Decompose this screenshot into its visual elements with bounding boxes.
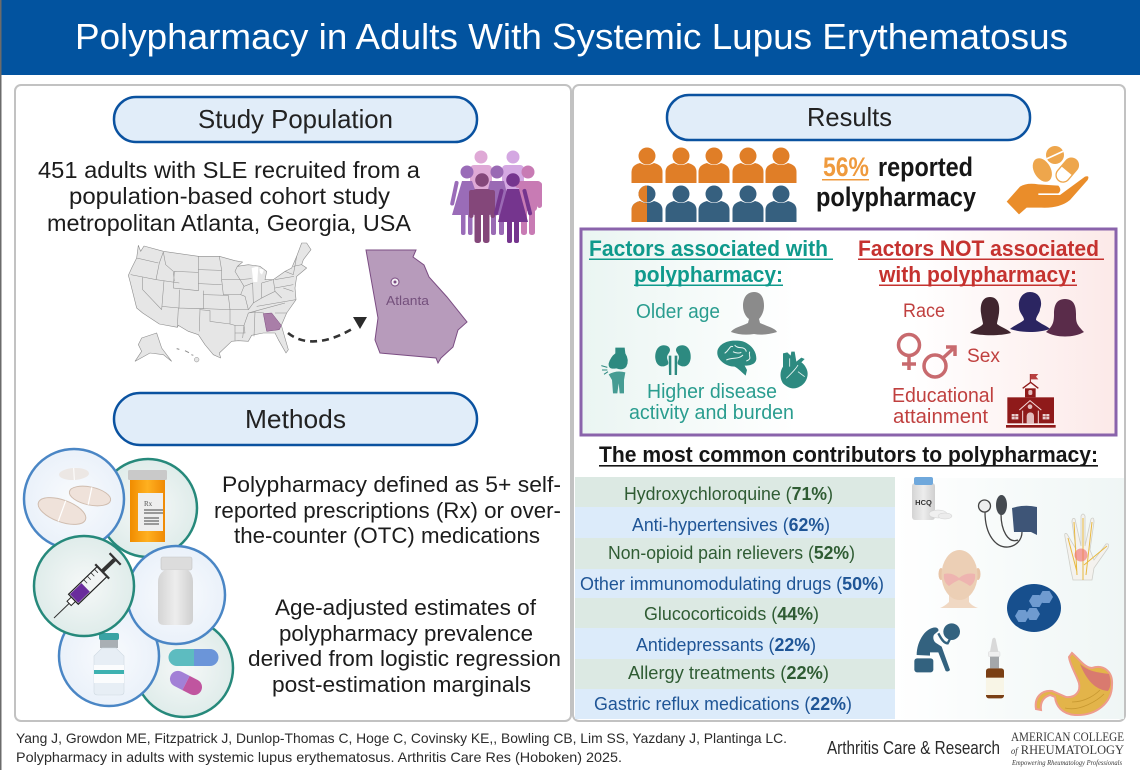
row: glucocorticoids <box>575 598 895 628</box>
row: non-opioid pain relievers: Non-opioid pain relievers (52%) <box>608 543 855 563</box>
heading: study population <box>114 97 477 142</box>
row: allergy treatments <box>575 659 895 689</box>
icon: molecule <box>1007 584 1061 632</box>
stat: 56 percent reported polypharmacy <box>816 152 976 212</box>
map: United States <box>128 243 311 362</box>
icon: grey head <box>731 292 777 335</box>
table: contributors with percentages <box>575 477 895 719</box>
column: associated factors <box>589 236 833 424</box>
icon: blood pressure cuff <box>978 495 1037 547</box>
row: anti-hypertensives: Anti-hypertensives (62%) <box>632 515 830 535</box>
row: gastric reflux medications <box>575 689 895 719</box>
stat: 56 percent reported polypharmacy: 56% <box>823 152 869 182</box>
icon: heart <box>780 352 808 388</box>
heading: associated factors <box>589 236 833 287</box>
citation: Polypharmacy in adults with systemic lupus erythematosus. Arthritis Care Res (Hoboken) 2025. <box>16 749 622 765</box>
logo: American College of Rheumatology: of RHEUMATOLOGY <box>1011 742 1125 757</box>
icon: syringe <box>34 536 134 636</box>
text: estimation method: derived from logistic regression <box>248 646 561 671</box>
icon: knee joint <box>601 348 628 393</box>
row: other immunomodulating drugs <box>575 569 895 598</box>
heading: most common contributors: The most common contributors to polypharmacy: <box>599 442 1098 467</box>
icon: capsules <box>135 619 233 717</box>
heading: associated factors: polypharmacy: <box>634 262 783 287</box>
row: other immunomodulating drugs: Other immunomodulating drugs (50%) <box>580 574 884 594</box>
icon: brain <box>717 341 756 376</box>
text: cohort description: 451 adults with SLE recruited from a <box>38 157 421 183</box>
row: gastric reflux medications: Gastric reflux medications (22%) <box>594 694 852 714</box>
heading: non-associated factors: Factors NOT associated <box>858 236 1099 261</box>
panel: results <box>573 85 1125 721</box>
stat: 56 percent reported polypharmacy: polypharmacy <box>816 182 976 212</box>
text: estimation method <box>248 595 561 697</box>
heading: associated factors: Factors associated with <box>589 236 828 261</box>
text: polypharmacy definition: the-counter (OTC) medications <box>234 523 540 548</box>
row: hydroxychloroquine <box>575 477 895 507</box>
logo: American College of Rheumatology: AMERICAN COLLEGE <box>1011 729 1124 744</box>
icon: prescription bottle: Rx <box>144 500 153 508</box>
icon: HCQ bottle <box>912 477 952 520</box>
icon: vial <box>59 606 159 706</box>
row: glucocorticoids: Glucocorticoids (44%) <box>644 604 819 624</box>
label: educational attainment: Educational <box>892 385 994 407</box>
icon: hand with nerve pain <box>1065 514 1109 580</box>
arrow: map to Georgia <box>288 317 367 341</box>
icon: hand holding pills <box>1007 143 1088 214</box>
citation: Yang J, Growdon ME, Fitzpatrick J, Dunlop-Thomas C, Hoge C, Covinsky KE,, Bowling CB, Lim SS, Yazdany J, Plantinga LC. <box>16 730 787 746</box>
icon: sex symbols <box>898 334 955 377</box>
row: anti-hypertensives <box>575 507 895 538</box>
text: cohort description <box>38 157 421 236</box>
text: estimation method: Age-adjusted estimates of <box>275 595 537 620</box>
label: sex: Sex <box>967 346 1000 367</box>
label: educational attainment: attainment <box>893 406 988 428</box>
label: disease activity: activity and burden <box>629 402 794 424</box>
icon: tablets <box>24 449 124 549</box>
highlighted state: Georgia <box>263 313 281 331</box>
row: allergy treatments: Allergy treatments (22%) <box>628 663 829 683</box>
map: Georgia with Atlanta: Atlanta <box>386 293 430 308</box>
logo: American College of Rheumatology: Empowering Rheumatology Professionals <box>1011 758 1122 767</box>
header banner <box>0 0 1140 75</box>
label: disease activity <box>629 381 794 424</box>
row: antidepressants: Antidepressants (22%) <box>636 635 816 655</box>
text: estimation method: post-estimation marginals <box>272 672 531 697</box>
icon: group of people <box>450 150 542 243</box>
logo: American College of Rheumatology <box>1011 729 1125 767</box>
icons: knee, kidneys, brain, heart <box>601 341 808 393</box>
stat: 56 percent reported polypharmacy: reported <box>878 152 973 182</box>
text: estimation method: polypharmacy prevalence <box>279 621 533 646</box>
icon: school building <box>1006 374 1056 428</box>
row: non-opioid pain relievers <box>575 538 895 569</box>
row: antidepressants <box>575 628 895 659</box>
icon: white bottle <box>127 546 225 644</box>
label: race: Race <box>903 301 945 322</box>
icon: HCQ bottle: HCQ <box>915 498 932 507</box>
column: non-associated factors <box>858 236 1104 428</box>
heading: results: Results <box>807 102 892 132</box>
panel: study population and methods <box>15 85 571 721</box>
heading: methods <box>114 393 477 445</box>
heading: study population: Study Population <box>198 104 393 134</box>
icon: person in distress <box>914 623 960 672</box>
icon cluster: medications <box>24 449 233 717</box>
text: polypharmacy definition <box>214 472 561 548</box>
text: polypharmacy definition: Polypharmacy defined as 5+ self- <box>222 472 561 497</box>
icon: stomach <box>1036 653 1112 715</box>
label: older age: Older age <box>636 301 720 323</box>
text: polypharmacy definition: reported prescriptions (Rx) or over- <box>214 498 561 523</box>
title: Polypharmacy in Adults With Systemic Lupus Erythematosus <box>75 16 1068 57</box>
label: disease activity: Higher disease <box>647 381 777 403</box>
heading: non-associated factors: with polypharmacy: <box>878 262 1077 287</box>
citation <box>16 730 787 765</box>
icon: face with butterfly rash <box>938 550 980 608</box>
panel: factors comparison <box>581 229 1116 435</box>
row: hydroxychloroquine: Hydroxychloroquine (71%) <box>624 484 833 504</box>
icon: prescription bottle <box>99 459 197 557</box>
icon: three silhouettes <box>970 292 1084 336</box>
heading: results <box>667 95 1030 140</box>
heading: non-associated factors <box>858 236 1104 287</box>
text: cohort description: metropolitan Atlanta, Georgia, USA <box>47 210 411 236</box>
icon: nasal spray <box>986 638 1004 698</box>
icon: kidneys <box>655 345 691 375</box>
map: Georgia with Atlanta <box>366 250 467 363</box>
pictogram: 56 percent of people <box>632 148 796 222</box>
panel: contributor icons <box>895 477 1124 719</box>
text: cohort description: population-based cohort study <box>69 183 390 209</box>
left page edge <box>0 0 2 770</box>
heading: methods: Methods <box>245 404 346 434</box>
journal name: Arthritis Care & Research <box>827 738 1000 758</box>
label: educational attainment <box>892 385 994 428</box>
